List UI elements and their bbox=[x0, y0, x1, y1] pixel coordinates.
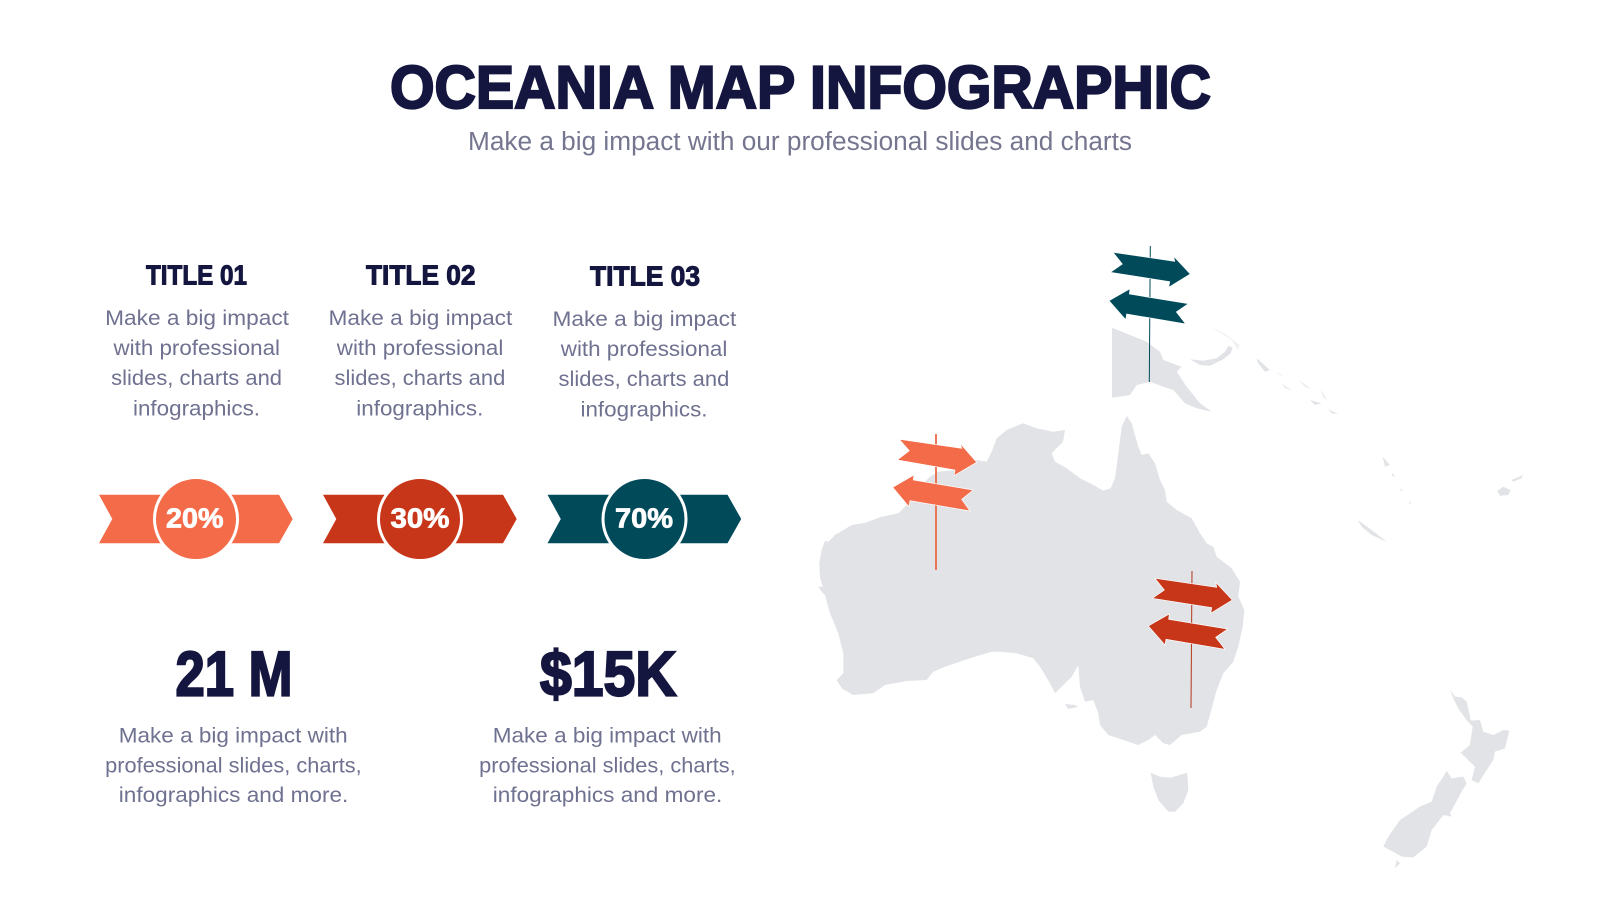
text block: title 01: with professional bbox=[112, 337, 280, 360]
text block: title 02: Make a big impact bbox=[328, 307, 512, 330]
signpost: red bbox=[1148, 571, 1232, 708]
stat description: 21 M: infographics and more. bbox=[119, 784, 348, 807]
stat description: $15K: infographics and more. bbox=[493, 784, 722, 807]
ribbon: 20% bbox=[99, 478, 293, 560]
stat description: $15K: professional slides, charts, bbox=[479, 754, 736, 777]
text block: title 02: slides, charts and bbox=[334, 367, 505, 390]
text block: title 02 bbox=[328, 307, 512, 420]
map region: Papua New Guinea and islands bbox=[1112, 326, 1338, 414]
text block: title 03 bbox=[552, 308, 736, 422]
stat value: 21 M: 21 M bbox=[176, 640, 292, 710]
subtitle: Make a big impact with our professional slides and charts bbox=[468, 128, 1132, 156]
text block: title 01: Make a big impact bbox=[105, 307, 289, 330]
heading: title 01: TITLE 01 bbox=[146, 260, 247, 290]
ribbon: 20%: 20% bbox=[166, 502, 224, 534]
text block: title 03: Make a big impact bbox=[552, 308, 736, 331]
text block: title 03: infographics. bbox=[580, 398, 708, 422]
stat description: $15K: Make a big impact with bbox=[493, 724, 722, 747]
stat description: $15K bbox=[479, 724, 736, 807]
map region: New Zealand bbox=[1383, 689, 1509, 868]
ribbon: 70%: 70% bbox=[615, 502, 673, 534]
text block: title 01: infographics. bbox=[133, 398, 260, 420]
text block: title 03: slides, charts and bbox=[558, 368, 729, 391]
arrow: red right bbox=[1152, 578, 1232, 613]
stat description: 21 M bbox=[105, 724, 362, 807]
stat description: 21 M: Make a big impact with bbox=[119, 724, 348, 747]
signpost: teal bbox=[1109, 246, 1190, 382]
map region: Kangaroo Island bbox=[1065, 704, 1078, 709]
signpost: coral bbox=[893, 434, 977, 570]
text block: title 02: infographics. bbox=[356, 398, 483, 420]
arrow: coral left bbox=[893, 475, 973, 511]
text block: title 01 bbox=[105, 307, 289, 420]
stat: $15K bbox=[479, 640, 736, 807]
panel: title 01 bbox=[105, 260, 289, 420]
map region: New Caledonia, Vanuatu and Fiji bbox=[1358, 457, 1523, 542]
arrow: teal left bbox=[1109, 289, 1188, 324]
ribbon: 30% bbox=[323, 478, 517, 560]
title: OCEANIA MAP INFOGRAPHIC bbox=[390, 54, 1211, 121]
map: Oceania bbox=[818, 326, 1523, 868]
ribbon: 70% bbox=[548, 478, 741, 560]
panel: title 03 bbox=[552, 260, 736, 422]
heading: title 02: TITLE 02 bbox=[366, 260, 476, 290]
panel: title 02 bbox=[328, 260, 512, 420]
map region: Tasmania bbox=[1151, 773, 1188, 812]
stat description: 21 M: professional slides, charts, bbox=[105, 754, 362, 777]
map region: Australia bbox=[818, 416, 1244, 745]
arrow: red left bbox=[1148, 614, 1228, 649]
arrow: coral right bbox=[897, 439, 977, 476]
arrow: teal right bbox=[1110, 252, 1190, 287]
text block: title 01: slides, charts and bbox=[111, 367, 282, 390]
text block: title 02: with professional bbox=[336, 337, 503, 360]
text block: title 03: with professional bbox=[560, 338, 727, 361]
stat: 21 M bbox=[105, 640, 362, 807]
heading: title 03: TITLE 03 bbox=[590, 260, 700, 292]
ribbon: 30%: 30% bbox=[390, 502, 450, 534]
stat value: $15K: $15K bbox=[540, 640, 676, 710]
